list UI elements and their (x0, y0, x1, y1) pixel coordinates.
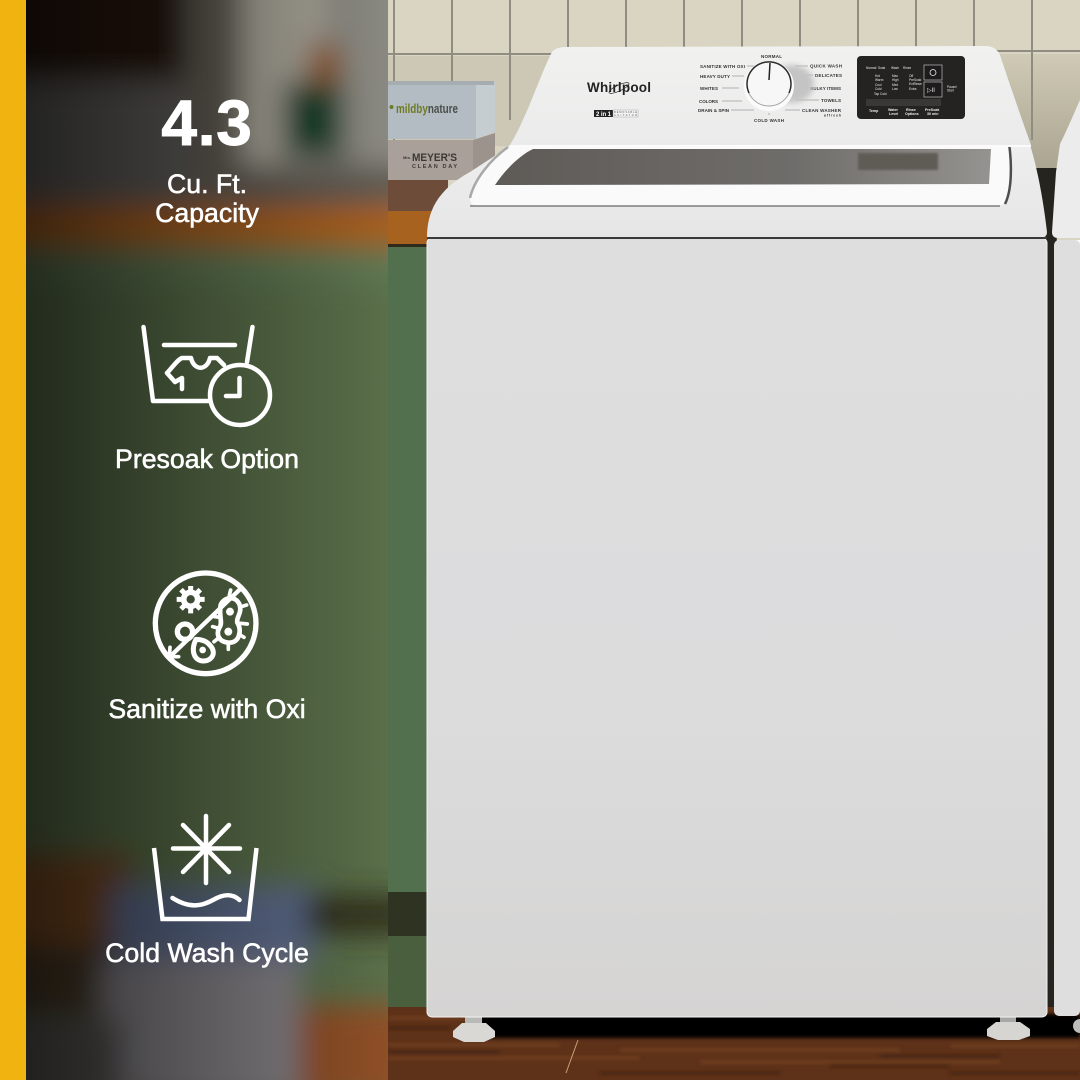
display panel: High (892, 78, 899, 82)
2 in 1 badge: 2 in 1 (596, 112, 612, 118)
gap between washers (1036, 168, 1057, 1016)
boxes on counter (388, 81, 495, 180)
display panel: Max (892, 74, 898, 78)
icon: sanitize no-germs (155, 573, 256, 674)
label: cold wash: Cold Wash Cycle (105, 938, 309, 968)
cycle labels: BULKY ITEMS (810, 86, 841, 91)
cycle labels: COLD WASH (754, 118, 784, 123)
display panel: PreSoak (925, 108, 939, 112)
stat: capacity label: Capacity (155, 198, 259, 228)
display panel (857, 56, 965, 119)
logo: Whirlpool (587, 80, 651, 95)
display panel: Warm (875, 78, 884, 82)
display panel: Rinse (903, 66, 911, 70)
display panel: Med (892, 83, 898, 87)
display panel: Cool (875, 83, 882, 87)
icon: cold wash basin (154, 816, 256, 919)
display panel: 30 min (927, 112, 938, 116)
display panel: Level (889, 112, 898, 116)
boxes on counter: CLEAN DAY (412, 164, 457, 170)
boxes on counter: mildbynature (396, 101, 458, 116)
display panel: Water (888, 108, 898, 112)
cycle labels: DELICATES (815, 73, 842, 78)
cycle labels: TOWELS (821, 98, 841, 103)
countertop (388, 180, 448, 247)
display panel: Extra (909, 87, 917, 91)
green cabinet wall (388, 245, 448, 1010)
2 in 1 badge: REMOVABLE (614, 111, 637, 114)
wood floor (388, 1007, 1080, 1080)
cycle labels: NORMAL (761, 54, 782, 59)
neighbouring washer (1052, 100, 1080, 1033)
cycle labels: CLEAN WASHER (802, 108, 842, 113)
display panel: Rinse (906, 108, 916, 112)
display panel: Low (892, 87, 899, 91)
display panel: Cold (875, 87, 882, 91)
boxes on counter: MEYER'S (412, 152, 457, 164)
display panel: Temp (869, 109, 879, 113)
display panel: Pause/ (947, 85, 957, 89)
cycle labels: COLORS (699, 99, 718, 104)
cycle labels: DRAIN & SPIN (698, 108, 729, 113)
cycle labels: SANITIZE WITH OXI (700, 64, 745, 69)
cycle labels: QUICK WASH (810, 64, 842, 68)
display panel: Soak (878, 66, 886, 70)
control console (510, 46, 1031, 145)
display panel: PreSoak (909, 78, 922, 82)
label: sanitize: Sanitize with Oxi (108, 694, 306, 724)
display panel: Wash (891, 66, 899, 70)
lid window (470, 143, 1011, 206)
cycle labels: HEAVY DUTY (700, 74, 730, 79)
washer feet (453, 1014, 1030, 1042)
display panel: Start (947, 88, 954, 92)
washer (427, 46, 1047, 1042)
display panel: Normal (866, 66, 877, 70)
display panel: Tap Cold (874, 92, 887, 96)
display panel: Options (905, 112, 919, 116)
dial (744, 61, 814, 111)
stat: capacity label: Cu. Ft. (167, 169, 247, 199)
stat: capacity label (155, 169, 260, 228)
wall tiles (388, 0, 1080, 240)
cycle labels (698, 54, 842, 123)
accent bar (0, 0, 26, 1080)
display panel: Hot (875, 74, 880, 78)
label: presoak: Presoak Option (115, 444, 299, 474)
display panel: Off (909, 74, 913, 78)
boxes on counter: Mrs. (403, 155, 411, 160)
icon: presoak basin with clock (144, 327, 270, 425)
cycle labels: affresh (824, 114, 841, 118)
2 in 1 badge (594, 110, 638, 118)
2 in 1 badge: AGITATOR (614, 114, 637, 117)
display panel: ▷II (927, 88, 935, 94)
cycle labels: WHITES (700, 86, 718, 91)
washer top deck (427, 145, 1047, 238)
panel: blurred left sidebar (26, 0, 388, 1080)
stat: capacity value: 4.3 (161, 87, 253, 159)
display panel: ExtRinse (909, 82, 922, 86)
washer cabinet (427, 238, 1047, 1017)
